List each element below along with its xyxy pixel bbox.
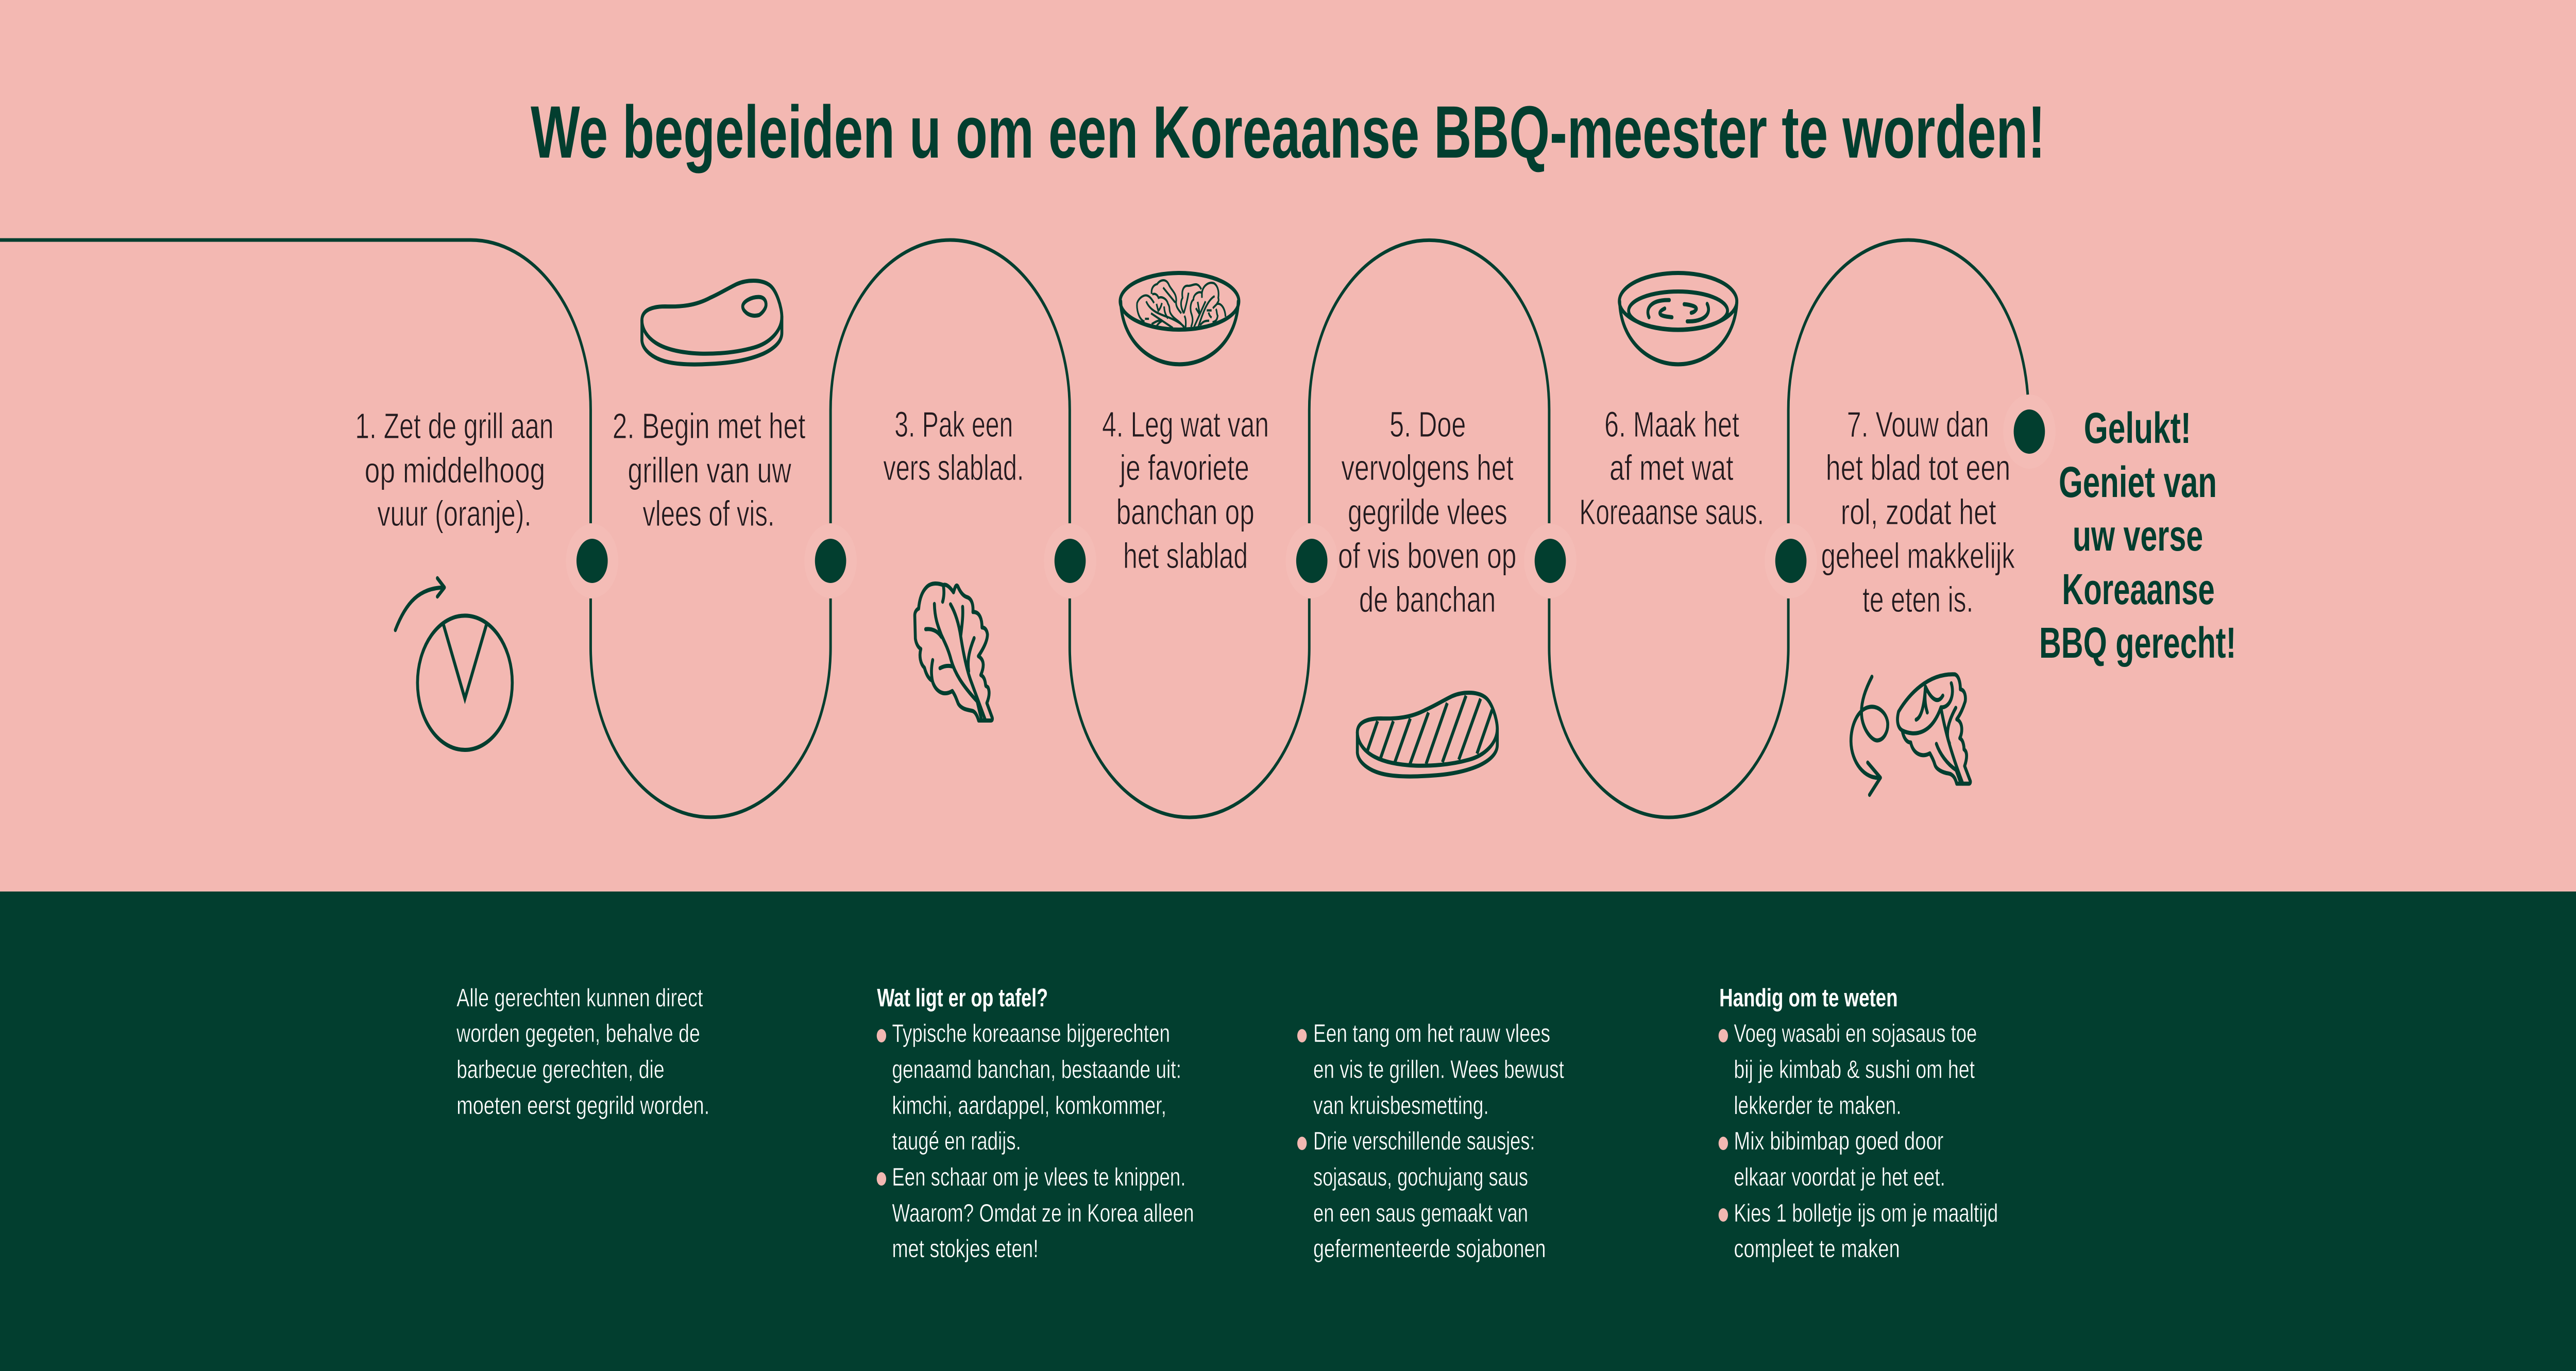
footer list: table items column one: kimchi, aardappel, komkommer, — [892, 1091, 1166, 1119]
footer list: tips: Kies 1 bolletje ijs om je maaltijd — [1734, 1199, 1998, 1227]
step 2 text — [613, 405, 806, 534]
step 5 text: de banchan — [1359, 579, 1496, 620]
step 4 text: je favoriete — [1119, 447, 1249, 488]
step 3 text — [883, 404, 1024, 488]
step 2 text: 2. Begin met het — [613, 405, 806, 446]
icon: rolling the leaf — [1851, 674, 1971, 795]
footer list: table items column one: Typische koreaanse bijgerechten — [892, 1019, 1170, 1047]
footer list: table items column two: en vis te grillen. Wees bewust — [1313, 1055, 1564, 1083]
step 3 text: vers slablad. — [883, 447, 1024, 488]
footer list: table items column two: sojasaus, gochujang saus — [1313, 1163, 1528, 1191]
footer list: table items column one: Een schaar om je vlees te knippen. — [892, 1163, 1185, 1191]
footer list: tips: elkaar voordat je het eet. — [1734, 1163, 1945, 1191]
footer list: table items column one — [877, 1019, 1194, 1262]
footer text: intro note: worden gegeten, behalve de — [456, 1019, 700, 1047]
icon: lettuce leaf — [915, 584, 992, 721]
step 7 text: rol, zodat het — [1841, 491, 1996, 532]
panel: pink background — [0, 0, 2576, 892]
footer list: table items column one: taugé en radijs. — [892, 1127, 1021, 1155]
step 6 text: 6. Maak het — [1604, 404, 1739, 444]
footer heading: Handig om te weten: Handig om te weten — [1719, 984, 1898, 1012]
footer list: table items column one: met stokjes eten! — [892, 1235, 1039, 1262]
closing message: Geniet van — [2059, 458, 2217, 506]
step 7 text — [1821, 404, 2015, 620]
step 5 text — [1338, 404, 1516, 620]
closing message: BBQ gerecht! — [2039, 619, 2236, 667]
step 7 text: 7. Vouw dan — [1847, 404, 1989, 444]
step 6 text: af met wat — [1609, 447, 1734, 488]
footer list: table items column two: Een tang om het rauw vlees — [1313, 1019, 1550, 1047]
closing message: Koreaanse — [2062, 565, 2215, 613]
step 2 text: vlees of vis. — [642, 493, 774, 534]
footer text: intro note: barbecue gerechten, die — [456, 1055, 665, 1083]
step 4 text: banchan op — [1116, 491, 1255, 532]
footer list: table items column one: genaamd banchan, bestaande uit: — [892, 1055, 1181, 1083]
step 7 text: het blad tot een — [1826, 447, 2010, 488]
winding path line — [0, 240, 2028, 817]
step 7 text: geheel makkelijk — [1821, 535, 2015, 576]
footer list: tips: Voeg wasabi en sojasaus toe — [1734, 1019, 1977, 1047]
step 1 text: op middelhoog — [365, 450, 545, 490]
icon: bowl with sauce — [1619, 273, 1737, 364]
step 4 text: het slablad — [1123, 535, 1248, 576]
icon: bowl with salad — [1120, 273, 1239, 364]
footer text: intro note — [456, 984, 709, 1119]
icon: grilled steak — [1358, 693, 1497, 777]
step 5 text: gegrilde vlees — [1348, 491, 1507, 532]
footer list: tips: Mix bibimbap goed door — [1734, 1127, 1943, 1155]
step 4 text — [1102, 404, 1269, 576]
footer list: table items column two: Drie verschillende sausjes: — [1313, 1127, 1535, 1155]
footer heading: Wat ligt er op tafel: Wat ligt er op tafel? — [877, 984, 1048, 1012]
step 1 text: vuur (oranje). — [377, 493, 531, 534]
step 4 text: 4. Leg wat van — [1102, 404, 1269, 444]
footer text: intro note: Alle gerechten kunnen direct — [456, 984, 703, 1012]
step 6 text — [1579, 404, 1764, 532]
step 1 text: 1. Zet de grill aan — [355, 405, 554, 446]
footer list: table items column one: Waarom? Omdat ze in Korea alleen — [892, 1199, 1194, 1227]
footer list: tips: bij je kimbab & sushi om het — [1734, 1055, 1975, 1083]
step 3 text: 3. Pak een — [894, 404, 1013, 444]
footer list: tips: compleet te maken — [1734, 1235, 1900, 1262]
closing message: uw verse — [2073, 512, 2203, 560]
panel: dark green footer background — [0, 892, 2576, 1371]
step 5 text: 5. Doe — [1389, 404, 1466, 444]
footer list: tips — [1719, 1019, 1998, 1262]
closing message: Gelukt! — [2084, 404, 2191, 452]
footer list: table items column two: en een saus gemaakt van — [1313, 1199, 1528, 1227]
footer list: tips: lekkerder te maken. — [1734, 1091, 1902, 1119]
step 1 text — [355, 405, 554, 534]
path dots — [566, 395, 2056, 598]
step 6 text: Koreaanse saus. — [1579, 491, 1764, 532]
icon: grill dial with arrow — [395, 578, 512, 750]
footer list: table items column two: gefermenteerde sojabonen — [1313, 1235, 1546, 1262]
step 5 text: of vis boven op — [1338, 535, 1516, 576]
step 2 text: grillen van uw — [628, 450, 791, 490]
footer list: table items column two: van kruisbesmetting. — [1313, 1091, 1489, 1119]
step 5 text: vervolgens het — [1341, 447, 1514, 488]
footer list: table items column two — [1297, 1019, 1564, 1262]
icon: raw steak — [642, 281, 782, 365]
footer text: intro note: moeten eerst gegrild worden. — [456, 1091, 709, 1119]
closing message — [2039, 404, 2236, 667]
step 7 text: te eten is. — [1862, 579, 1973, 620]
title: We begeleiden u om een Koreaanse BBQ-meester te worden! — [531, 91, 2045, 174]
